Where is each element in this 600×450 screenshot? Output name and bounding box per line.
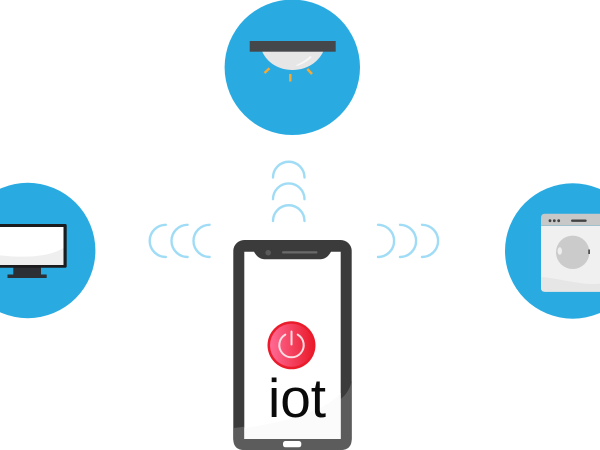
phone speaker bbox=[282, 251, 318, 254]
icon: power button bbox=[268, 321, 316, 369]
phone camera bbox=[265, 250, 271, 256]
icon: detector light rays bbox=[264, 68, 312, 82]
phone body bbox=[233, 240, 352, 450]
panel: television bbox=[0, 183, 95, 318]
icon: washer drum bbox=[556, 236, 589, 269]
icon: detector dome bbox=[262, 51, 324, 70]
text: iot: iot bbox=[268, 367, 326, 429]
signal waves: right bbox=[378, 225, 438, 257]
icon: washer control panel bbox=[541, 214, 600, 226]
phone home button bbox=[283, 441, 301, 447]
icon: monitor stand bbox=[8, 267, 47, 278]
panel: smartphone bbox=[233, 240, 352, 450]
phone screen bbox=[244, 252, 341, 439]
signal waves: top bbox=[273, 162, 304, 221]
panel: smoke detector bbox=[225, 0, 360, 135]
icon: monitor screen bbox=[0, 224, 67, 268]
panel: washing machine bbox=[505, 183, 600, 319]
icon: detector mount bbox=[250, 41, 336, 52]
icon: washer body bbox=[541, 226, 600, 292]
signal waves: left bbox=[150, 225, 210, 257]
